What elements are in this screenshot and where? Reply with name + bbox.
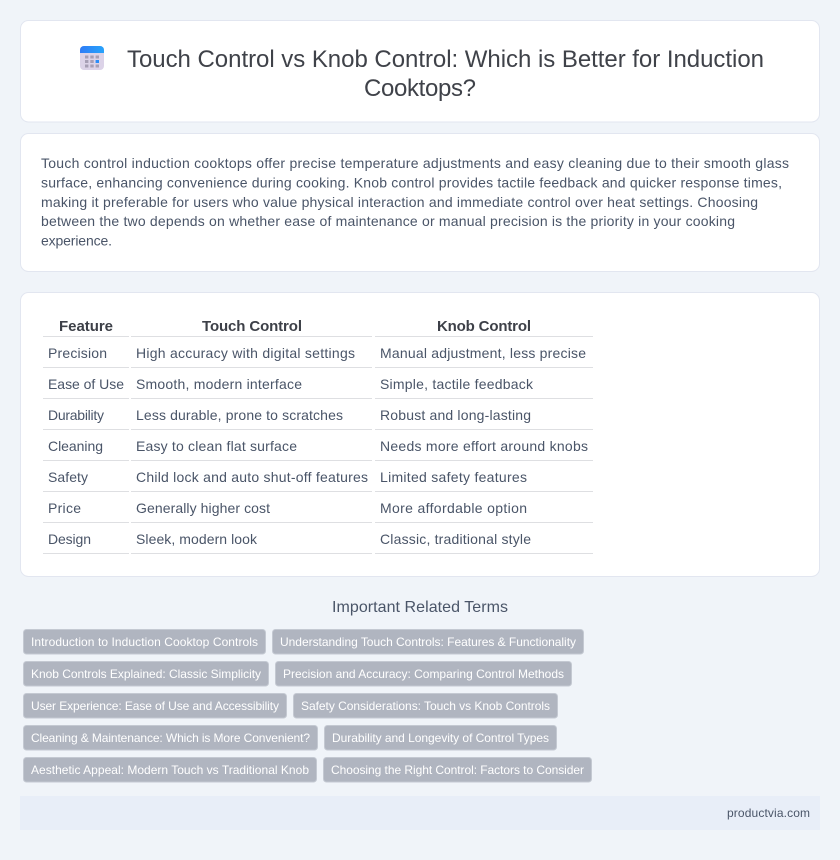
tag [276,662,572,686]
table row: safety: Limited safety features [380,469,527,485]
tag [294,694,558,718]
table header [59,318,531,335]
tag: Choosing the Right Control: Factors to Consider [331,763,584,777]
table row: durability [48,407,531,423]
tag: Precision and Accuracy: Comparing Control Methods [283,667,564,681]
table header: Feature [59,318,113,335]
table row: ease of use: Smooth, modern interface [136,376,302,392]
heading: related terms: Important Related Terms [332,599,508,616]
icon: calendar grid [80,46,104,70]
table header: Touch Control [202,318,302,335]
tag [324,758,592,782]
tag: Knob Controls Explained: Classic Simplicity [31,667,261,681]
text block: introduction: surface, enhancing convenience during cooking. Knob control provides tactile feedback and quicker response times, [41,174,782,190]
table row: ease of use: Simple, tactile feedback [380,376,534,392]
title: Touch Control vs Knob Control: Which is Better for Induction [127,46,764,73]
tag: Safety Considerations: Touch vs Knob Controls [301,699,550,713]
tag: User Experience: Ease of Use and Accessibility [31,699,279,713]
tag [24,758,316,782]
table row: durability: Robust and long-lasting [380,407,531,423]
text block: introduction: experience. [41,232,112,248]
text block: introduction: between the two depends on whether ease of maintenance or manual precision is the priority in your cooking [41,213,735,229]
table row: safety: Child lock and auto shut-off features [136,469,368,485]
table row: cleaning: Easy to clean flat surface [136,438,297,454]
footer [20,796,820,830]
tag [24,662,268,686]
table row: precision: Manual adjustment, less precise [380,345,586,361]
text block: introduction: Touch control induction cooktops offer precise temperature adjustments and easy cleaning due to their smooth glass [41,155,789,171]
table header: Knob Control [437,318,531,335]
panel: comparison table [20,292,820,576]
title: Cooktops? [364,75,476,102]
table row: safety [48,469,527,485]
table row: design [48,531,531,547]
table row: durability: Durability [48,407,104,423]
table row: safety: Safety [48,469,88,485]
table row: price: More affordable option [380,500,527,516]
title [127,46,764,102]
tag [272,630,584,654]
tag: Understanding Touch Controls: Features & Functionality [280,635,576,649]
table row: cleaning: Cleaning [48,438,103,454]
tag [24,630,266,654]
table row: price: Price [48,500,81,516]
table row: design: Classic, traditional style [380,531,531,547]
table row: design: Design [48,531,91,547]
table row: cleaning: Needs more effort around knobs [380,438,588,454]
tag: Cleaning & Maintenance: Which is More Convenient? [31,731,310,745]
tag: Introduction to Induction Cooktop Controls [31,635,258,649]
tag [24,694,286,718]
text block: introduction [41,155,789,248]
table row: ease of use: Ease of Use [48,376,124,392]
panel: header [20,20,820,122]
panel: related term tags [24,630,592,782]
table row: design: Sleek, modern look [136,531,258,547]
panel: introduction [20,134,820,272]
table row: precision: High accuracy with digital settings [136,345,355,361]
table row: precision: Precision [48,345,107,361]
footer text: source: productvia.com [727,806,810,820]
text block: introduction: making it preferable for users who value physical interaction and immediate control over heat settings. Choosing [41,194,758,210]
tag [24,726,318,750]
tag: Aesthetic Appeal: Modern Touch vs Traditional Knob [31,763,309,777]
tag: Durability and Longevity of Control Types [332,731,549,745]
tag [324,726,556,750]
table row: precision [48,345,586,361]
table row: durability: Less durable, prone to scratches [136,407,343,423]
table row: price: Generally higher cost [136,500,270,516]
table row: ease of use [48,376,534,392]
table row: cleaning [48,438,588,454]
table row: price [48,500,527,516]
